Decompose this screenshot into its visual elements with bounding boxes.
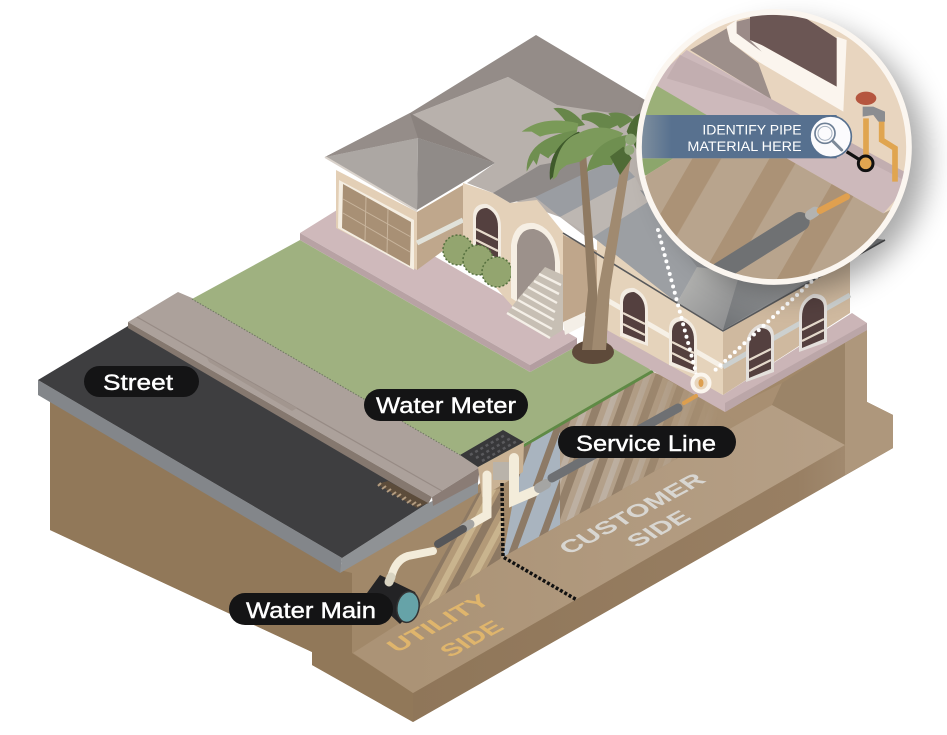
service pipes xyxy=(391,396,696,578)
label: water main: Water Main xyxy=(246,598,376,623)
label: service line: Service Line xyxy=(576,431,716,456)
basement walls xyxy=(723,383,782,424)
utility side trench wall xyxy=(412,488,503,612)
gable roof xyxy=(493,157,595,203)
plinth and driveway xyxy=(300,205,867,412)
banner: MATERIAL HERE xyxy=(687,138,802,154)
utility side text: UTILITY xyxy=(381,590,497,656)
sidewalk xyxy=(128,292,480,497)
garage door xyxy=(338,180,414,270)
magnifier callout shadow xyxy=(661,26,927,292)
zoomed plinth xyxy=(647,50,913,213)
window: entry xyxy=(473,204,501,262)
label: water meter: Water Meter xyxy=(376,393,516,418)
archway xyxy=(511,223,560,310)
banner: IDENTIFY PIPE xyxy=(702,121,802,137)
customer side trench wall xyxy=(503,372,772,557)
storm drain xyxy=(377,481,428,508)
garage wall xyxy=(336,170,417,270)
customer side text: CUSTOMER xyxy=(553,469,711,558)
lawn xyxy=(192,240,653,467)
label: street xyxy=(84,366,199,397)
dotted leader lines xyxy=(658,230,821,380)
label: service line xyxy=(558,426,736,458)
entry walls xyxy=(463,183,567,323)
zoomed soil xyxy=(645,158,890,280)
zoomed window xyxy=(690,13,847,112)
main roof light face xyxy=(412,77,655,240)
magnifier icon xyxy=(810,116,873,171)
label: water main xyxy=(229,593,393,625)
window: left 1 xyxy=(620,288,648,346)
label: street: Street xyxy=(103,370,173,395)
ground block xyxy=(50,330,893,722)
water meter box xyxy=(460,430,524,497)
utility side text xyxy=(381,590,509,661)
window: right 1 xyxy=(746,324,774,382)
zoomed faucet xyxy=(856,92,895,182)
marker ring xyxy=(692,374,710,392)
label: water meter xyxy=(364,389,528,421)
house xyxy=(325,35,885,395)
customer side text: SIDE xyxy=(621,506,696,551)
window: right 2 xyxy=(799,294,827,352)
zoomed lawn xyxy=(646,86,706,115)
magnifier callout xyxy=(636,10,912,285)
utility side text: SIDE xyxy=(434,616,509,661)
back roof xyxy=(325,35,650,163)
water main xyxy=(367,575,422,624)
palm tree xyxy=(522,108,640,364)
banner xyxy=(630,115,837,158)
right wing roof xyxy=(535,158,635,217)
garage roof xyxy=(325,138,418,210)
stairs xyxy=(507,267,563,338)
window: left 2 xyxy=(669,317,697,375)
property boundary line xyxy=(502,483,577,600)
zoomed service line xyxy=(720,197,847,272)
street xyxy=(38,292,480,573)
shrubs xyxy=(443,235,512,287)
right wing wall xyxy=(597,240,723,395)
trench floor xyxy=(353,405,845,693)
